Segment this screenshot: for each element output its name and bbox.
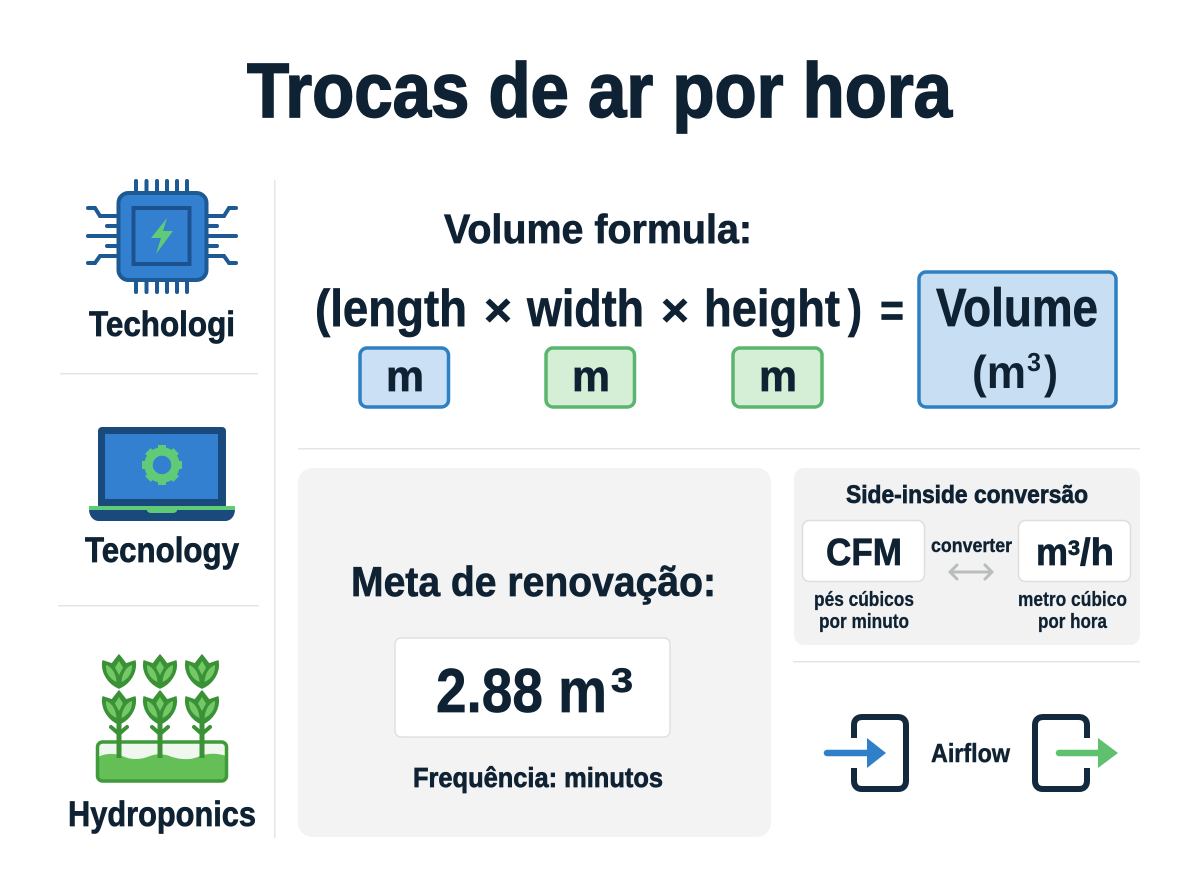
unit box: height: [733, 348, 822, 407]
icon: laptop with gear: [89, 427, 235, 521]
label: converter: converter: [931, 536, 1013, 557]
icon: air inlet: [827, 717, 906, 789]
caption: m3/h: metro cúbico: [1018, 589, 1127, 611]
caption: m3/h: por hora: [1038, 611, 1108, 633]
result box: volume: 3: [1027, 347, 1041, 377]
caption: CFM: [814, 589, 914, 633]
result box: volume: [919, 272, 1116, 407]
caption: CFM: por minuto: [819, 611, 909, 633]
formula expression: ×: [484, 284, 512, 336]
formula expression: [315, 280, 904, 338]
value card: 3: [611, 662, 633, 700]
label: Techologi: Techologi: [89, 305, 235, 344]
formula expression: height: [704, 280, 840, 338]
icon: hydroponic plants: [98, 655, 226, 781]
result box: volume: ): [1044, 346, 1058, 398]
result box: volume: Volume: [936, 278, 1098, 338]
unit box: length: m: [386, 352, 424, 401]
heading: renewal target: Meta de renovação:: [351, 558, 716, 605]
icon: microchip: [88, 181, 236, 292]
unit box: height: m: [759, 352, 797, 401]
caption: m3/h: [1018, 589, 1127, 633]
sidebar: topics: [68, 181, 256, 834]
panel: airflow: [827, 717, 1118, 789]
formula expression: width: [526, 280, 644, 338]
value card: [395, 638, 670, 737]
frequency note: Frequência: minutos: [413, 762, 663, 793]
formula expression: ): [848, 280, 862, 338]
arrow: two-way conversion: [950, 565, 992, 579]
label: Hydroponics: Hydroponics: [68, 795, 256, 834]
panel: renewal target: [298, 468, 771, 837]
card: m3/h: /h: [1080, 532, 1114, 574]
formula expression: (length: [315, 280, 467, 338]
card: CFM: [802, 520, 924, 582]
card: m3/h: m: [1036, 532, 1068, 574]
formula expression: =: [880, 284, 904, 336]
card: m3/h: [1018, 520, 1130, 582]
card: m3/h: 3: [1068, 537, 1080, 560]
unit box: width: [546, 348, 634, 407]
unit box: width: m: [572, 352, 610, 401]
title: Trocas de ar por hora: [247, 48, 953, 134]
caption: CFM: pés cúbicos: [814, 589, 914, 611]
heading: conversion: Side-inside conversão: [846, 481, 1088, 509]
icon: air outlet: [1035, 717, 1118, 789]
card: CFM: CFM: [826, 532, 902, 574]
heading: volume formula: Volume formula:: [444, 206, 752, 252]
result box: volume: (m: [972, 346, 1026, 398]
value card: 2.88 m: [436, 657, 607, 726]
label: Tecnology: Tecnology: [85, 531, 239, 570]
unit box: length: [360, 348, 448, 407]
label: airflow: Airflow: [931, 738, 1011, 768]
panel: volume formula: [315, 206, 1116, 407]
formula expression: ×: [661, 284, 689, 336]
panel: unit conversion: [794, 468, 1140, 645]
